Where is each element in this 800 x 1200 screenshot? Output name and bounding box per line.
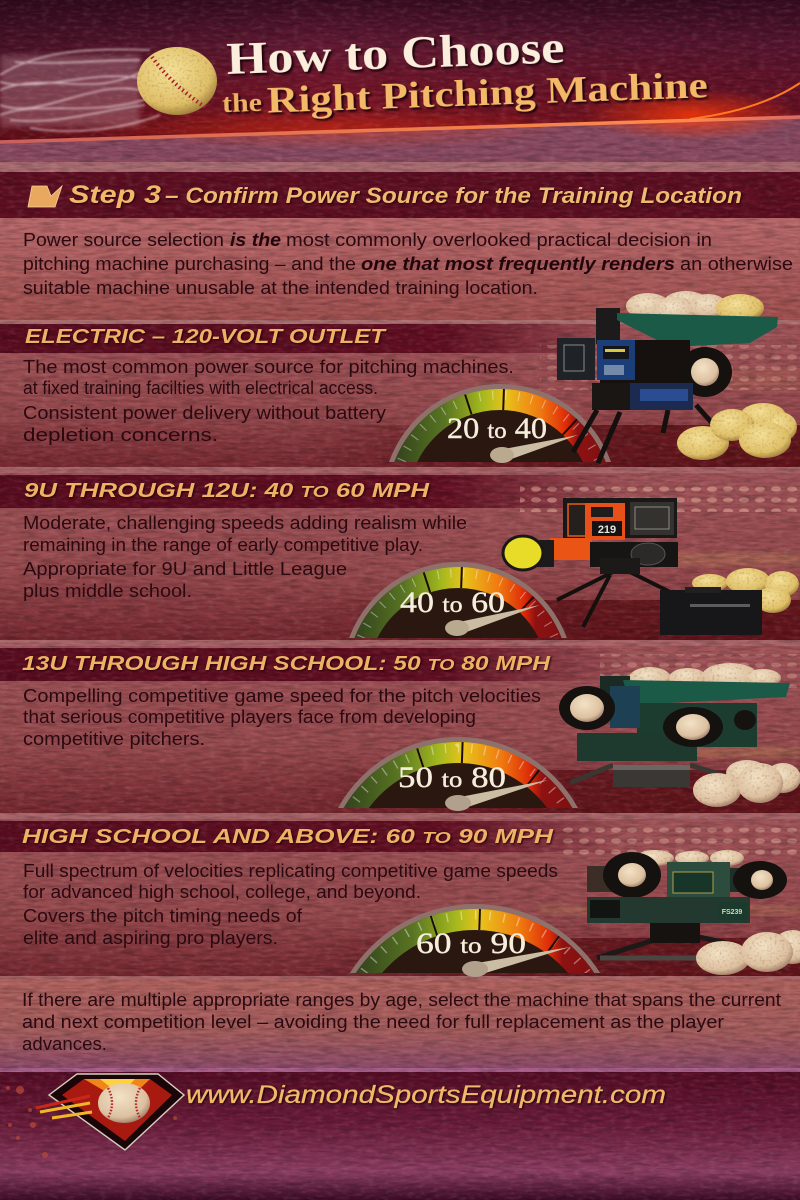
panel: electric 120-volt [23,291,797,464]
gauge: 50 to 80: 50 to 80 [398,761,506,794]
intro text [23,229,793,298]
intro text: is the [230,229,281,250]
closing paragraph: If there are multiple appropriate ranges by age, select the machine that spans the current [22,989,782,1010]
body text: that serious competitive players face from developing [23,706,476,727]
title line 2: Right Pitching Machine [266,65,708,122]
body text: remaining in the range of early competitive play. [23,534,423,555]
icon: speeding baseball [0,47,217,131]
body text: elite and aspiring pro players. [23,927,278,948]
intro text: suitable machine unusable at the intended training location. [23,277,538,298]
section heading: HIGH SCHOOL AND ABOVE: 60 TO 90 MPH [22,826,554,848]
machine: green twin-wheel machine [559,663,800,807]
machine: green dual-lens machine [587,850,800,975]
step heading: – Confirm Power Source for the Training Location [165,183,742,208]
closing paragraph [22,989,782,1054]
body text: plus middle school. [23,580,192,601]
title [220,16,708,123]
machine: electric pitching machine [557,291,797,463]
section heading: 13U THROUGH HIGH SCHOOL: 50 TO 80 MPH [22,653,551,675]
gauge: 60 to 90: 60 to 90 [416,927,526,960]
section heading: 9U THROUGH 12U: 40 TO 60 MPH [24,480,430,502]
body text: Full spectrum of velocities replicating competitive game speeds [23,860,558,881]
machine display: 219 [598,524,616,536]
title line 2: the [222,88,263,118]
body text: at fixed training facilties with electrical access. [23,377,378,398]
panel: 13U through high school [22,656,800,811]
intro text: one that most frequently renders [361,253,675,274]
closing paragraph: advances. [22,1033,107,1054]
intro text: most commonly overlooked practical decision in [286,229,712,250]
body text: The most common power source for pitching machines. [23,356,514,377]
body text: Covers the pitch timing needs of [23,905,303,926]
gauge: 50 to 80 [338,737,578,811]
step heading: Step 3 [69,181,161,209]
title line 1: How to Choose [226,21,565,84]
intro text: pitching machine purchasing – and the [23,253,356,274]
body text: Appropriate for 9U and Little League [23,558,347,579]
body text: Consistent power delivery without battery [23,402,387,423]
gauge: 20 to 40: 20 to 40 [447,412,547,445]
intro text: Power source selection [23,229,224,250]
icon: step marker [28,186,62,207]
body text: Moderate, challenging speeds adding realism while [23,512,467,533]
gauge: 40 to 60: 40 to 60 [400,586,505,619]
body text [23,685,541,749]
body text: for advanced high school, college, and beyond. [23,881,421,902]
closing paragraph: and next competition level – avoiding the need for full replacement as the player [22,1011,724,1032]
body text [23,512,467,601]
machine label: FS239 [722,909,742,916]
panel: high school and above [22,828,800,977]
body text: competitive pitchers. [23,728,205,749]
gauge: 40 to 60 [349,562,567,638]
step heading [28,181,742,209]
footer logo: diamond with baseball [6,1074,184,1158]
body text [23,356,514,445]
body text: depletion concerns. [23,424,218,445]
body text [23,860,558,948]
section heading: ELECTRIC – 120-VOLT OUTLET [25,326,387,348]
body text: Compelling competitive game speed for the pitch velocities [23,685,541,706]
machine: orange pitching machine [503,498,799,635]
header accent line with flare [0,83,800,150]
panel: 9U through 12U [23,482,799,638]
intro text: an otherwise [680,253,793,274]
footer website url: www.DiamondSportsEquipment.com [186,1081,666,1109]
gauge: 60 to 90 [350,904,600,977]
gauge: 20 to 40 [389,384,611,463]
